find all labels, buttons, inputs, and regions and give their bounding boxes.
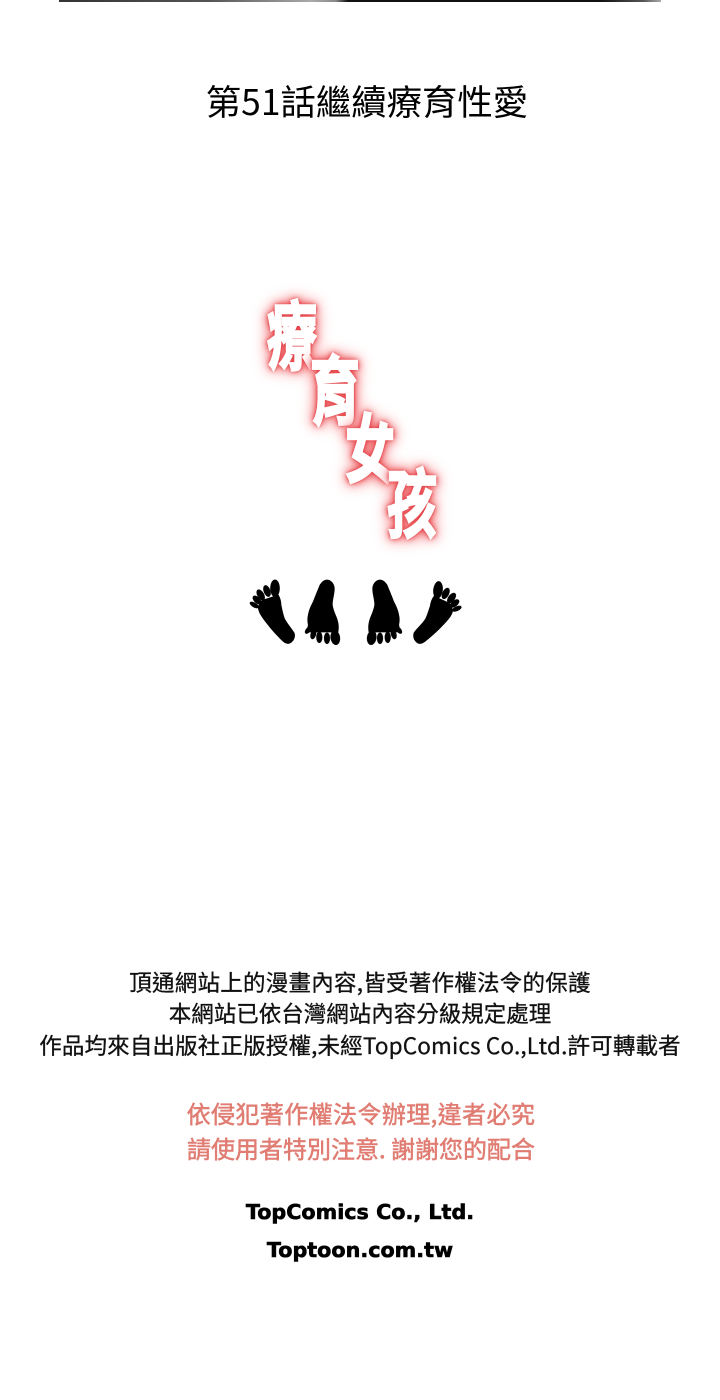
copyright notice line 2: 本網站已依台灣網站內容分級規定處理	[169, 997, 551, 1029]
icon: right outer foot	[413, 579, 465, 648]
website: Toptoon.com.tw	[267, 1238, 453, 1262]
warning line 1: 依侵犯著作權法令辦理,違者必究	[187, 1095, 535, 1130]
icon: four footprints	[250, 579, 462, 646]
copyright notice line 3: 作品均來自出版社正版授權,未經TopComics Co.,Ltd.許可轉載者	[39, 1029, 681, 1061]
logo character 3: 女	[345, 391, 395, 499]
icon: left outer foot	[249, 580, 295, 644]
icon: right inner foot	[366, 580, 403, 646]
copyright notice line 1: 頂通網站上的漫畫內容,皆受著作權法令的保護	[129, 966, 591, 998]
logo character 2: 育	[310, 333, 360, 441]
logo character 4: 孩	[387, 446, 437, 554]
company name: TopComics Co., Ltd.	[246, 1200, 474, 1224]
logo: glowing vertical title	[257, 278, 446, 554]
logo character 1: 療	[267, 278, 317, 386]
warning line 2: 請使用者特別注意. 謝謝您的配合	[187, 1130, 535, 1165]
title: 第51話繼續療育性愛	[206, 75, 528, 126]
icon: left inner foot	[304, 580, 341, 646]
top image edge bar	[59, 0, 661, 2]
